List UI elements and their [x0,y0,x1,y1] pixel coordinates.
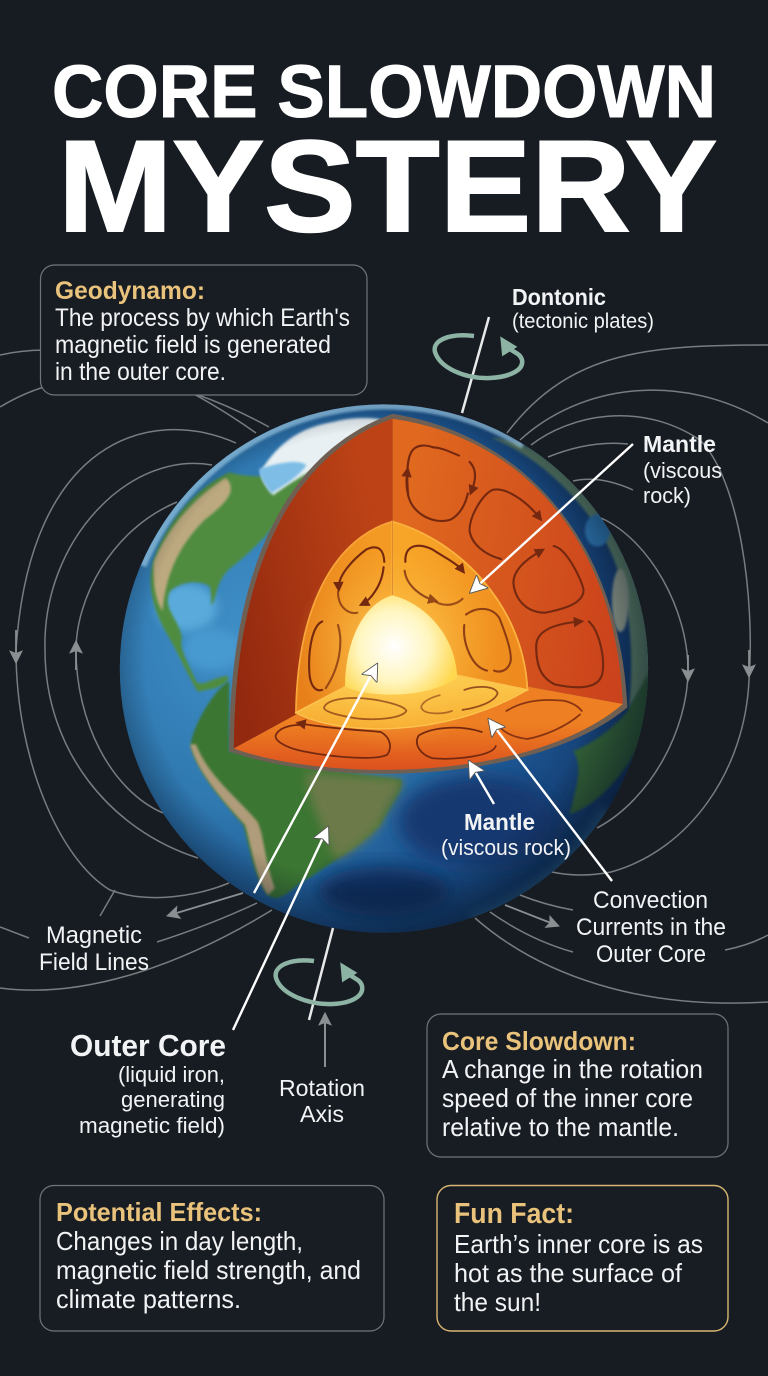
panel: Fun Fact: Earth’s inner core is as [454,1229,703,1259]
label: Rotation Axis [279,1075,365,1127]
panel: Fun Fact: the sun! [454,1287,541,1317]
label: upper Mantle: (viscous [643,458,722,483]
arrow: outer core pointer [233,829,327,1030]
label: upper Mantle [643,431,722,508]
panel: Core Slowdown: relative to the mantle. [442,1112,679,1142]
label: upper Mantle: Mantle [643,431,716,457]
panel: Potential Effects: Changes in day length, [56,1226,303,1256]
panel: Potential Effects: magnetic field strength, and [56,1255,361,1285]
continents and surface [120,404,654,933]
panel: Core Slowdown [427,1014,728,1157]
label: Outer Core: (liquid iron, [118,1062,225,1087]
label: lower Mantle: (viscous rock) [441,835,571,860]
seam lines [391,419,393,595]
label: Convection Currents: Currents in the [576,914,726,941]
convection current loops [276,445,603,759]
label: Outer Core: magnetic field) [79,1113,225,1138]
arrow: lower mantle pointer [470,763,494,804]
field direction arrows [16,630,749,925]
panel: Geodynamo [40,265,367,395]
label: upper Mantle: rock) [643,483,691,508]
label: Convection Currents [576,887,726,968]
label: Dontonic: Dontonic [512,284,606,310]
pointer arrows [100,444,633,1067]
inner core [345,595,457,695]
panel: Core Slowdown: Core Slowdown: [442,1026,636,1056]
panel: Fun Fact [437,1186,728,1331]
label: Rotation Axis: Rotation [279,1075,365,1101]
arrow: convection pointer [490,721,612,881]
label: Convection Currents: Outer Core [596,941,706,968]
label: Outer Core [70,1028,226,1138]
label: lower Mantle [441,809,571,860]
mantle faces [234,419,623,770]
panel: Potential Effects: Potential Effects: [56,1197,262,1227]
cutaway outer rim [229,414,627,774]
magnetic field lines [0,345,768,1003]
panel: Geodynamo: The process by which Earth's [55,304,350,332]
panel: Core Slowdown: speed of the inner core [442,1083,693,1113]
title: MYSTERY [58,113,717,259]
outer core faces [294,522,527,751]
label: Magnetic Field Lines: Field Lines [39,949,149,976]
title: CORE SLOWDOWN [52,50,716,133]
panel: Fun Fact: hot as the surface of [454,1258,683,1288]
arrow: inner core pointer [254,666,376,893]
panel: Potential Effects: climate patterns. [56,1284,241,1314]
label: Rotation Axis: Axis [300,1101,344,1127]
label: Magnetic Field Lines [39,922,149,976]
Earth globe cutaway [120,404,654,933]
panel: Core Slowdown: A change in the rotation [442,1054,703,1084]
label: Magnetic Field Lines: Magnetic [46,922,142,949]
panel: Potential Effects [40,1186,384,1331]
top rotation axis [435,317,522,413]
ocean sphere [120,404,648,933]
arrow: upper mantle pointer [472,444,633,591]
label: lower Mantle: Mantle [464,809,535,835]
label: Outer Core: generating [121,1087,225,1112]
title [52,50,717,259]
tick: magnetic field label [100,890,115,916]
bottom rotation axis [276,928,362,1020]
label: Convection Currents: Convection [593,887,708,914]
arrow: rotation axis pointer [324,1016,326,1067]
panel: Geodynamo: in the outer core. [55,358,226,386]
label: Dontonic: (tectonic plates) [512,310,654,333]
panel: Geodynamo: Geodynamo: [55,277,205,305]
panel: Geodynamo: magnetic field is generated [55,331,331,359]
label: Outer Core: Outer Core [70,1028,226,1063]
label: Dontonic [512,284,654,333]
panel: Fun Fact: Fun Fact: [454,1198,574,1230]
